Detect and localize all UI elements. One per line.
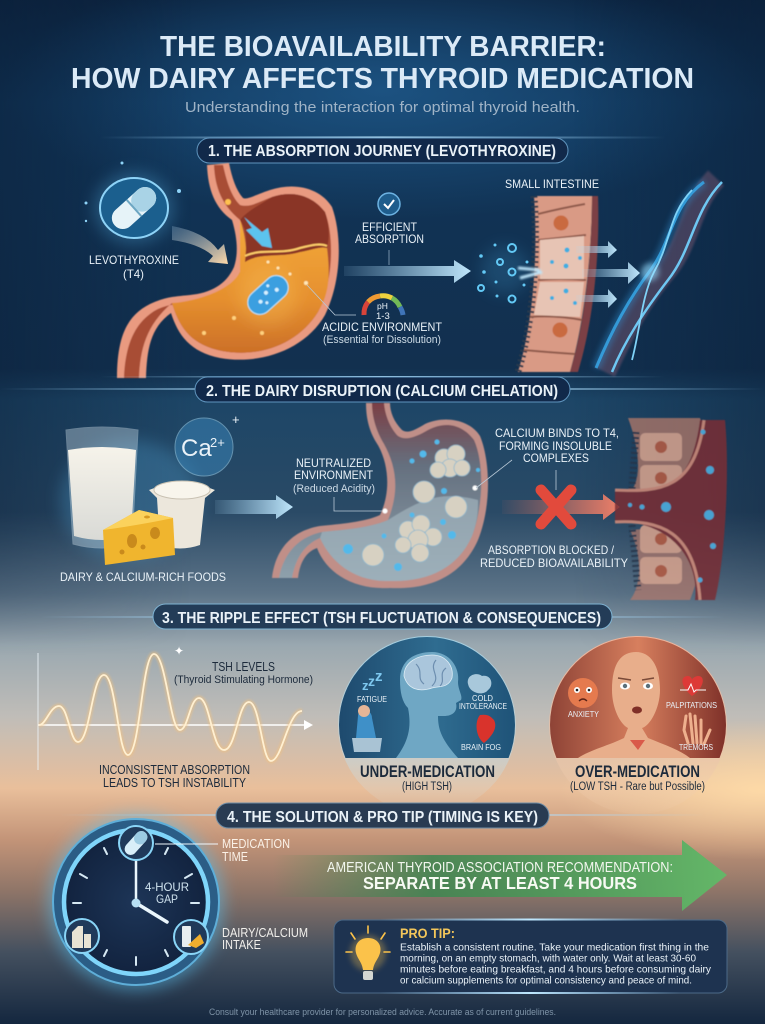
section 1 heading [100,136,665,163]
illustration: symptoms: INTOLERANCE [459,702,507,711]
footer disclaimer: Consult your healthcare provider for personalized advice. Accurate as of current guidelines. [209,1007,556,1018]
label: dairy intake: INTAKE [222,938,261,952]
label: inconsistent absorption: LEADS TO TSH INSTABILITY [103,776,247,790]
arrows: absorption into blood [518,241,640,308]
disc [338,636,516,814]
illustration: symptoms [550,637,726,758]
label: inconsistent absorption: INCONSISTENT ABSORPTION [99,763,250,777]
callout: ATA recommendation arrow: SEPARATE BY AT LEAST 4 HOURS [363,873,637,893]
illustration: symptoms: z [362,678,369,693]
ticks [73,848,199,965]
arrow: blocked absorption [502,494,620,520]
section 4 heading: 4. THE SOLUTION & PRO TIP (TIMING IS KEY) [227,809,538,826]
label: acidic environment: ACIDIC ENVIRONMENT [322,320,443,334]
label: neutralized environment: NEUTRALIZED [296,458,371,470]
subtitle: Understanding the interaction for optimal thyroid health. [185,100,580,116]
icon: pH gauge: 1-3 [376,311,390,322]
icon: calcium ion: Ca [181,435,212,462]
section 2 heading [0,376,765,402]
label: TSH levels: TSH LEVELS [212,660,275,674]
icon: dairy foods [60,427,215,565]
panel: over-medication [549,636,727,792]
label: under-medication: UNDER-MEDICATION [360,762,495,781]
label: 4-hour gap: GAP [156,892,178,906]
label: over-medication [570,762,705,793]
icon: calcium ion: + [232,412,240,427]
icon: levothyroxine pill [84,162,181,244]
label: efficient absorption: ABSORPTION [355,234,424,246]
label: absorption blocked [480,543,628,570]
icon: medication time [119,826,153,860]
label: calcium binds [476,426,619,490]
illustration: symptoms: ANXIETY [568,709,599,719]
illustration: symptoms: COLD [472,694,493,703]
icon: calcium ion: 2+ [210,435,225,450]
label: absorption blocked: ABSORPTION BLOCKED / [488,543,615,557]
panel: absorption journey [84,162,722,378]
illustration: stomach [117,163,339,378]
pro tip text: Establish a consistent routine. Take your medication first thing in the [400,942,709,954]
label: TSH levels [174,660,313,686]
label: calcium binds: FORMING INSOLUBLE [499,439,612,453]
label: medication time: MEDICATION [222,837,290,851]
label: dairy foods: DAIRY & CALCIUM-RICH FOODS [60,570,226,584]
icon: pH gauge [364,296,403,322]
label: efficient absorption [355,222,424,265]
label: efficient absorption: EFFICIENT [362,222,417,234]
icon: pH gauge: pH [377,301,388,311]
title: HOW DAIRY AFFECTS THYROID MEDICATION [71,63,694,95]
chart: TSH wave [38,644,313,770]
label: dairy intake: DAIRY/CALCIUM [222,926,308,940]
icon: light bulb [346,926,390,980]
icon: dairy right [174,920,208,954]
callout: ATA recommendation arrow [273,840,727,911]
label: levothyroxine: (T4) [123,267,144,281]
section 3 heading: 3. THE RIPPLE EFFECT (TSH FLUCTUATION & CONSEQUENCES) [162,610,601,627]
icon: calcium ion [175,412,240,476]
illustration: blocked intestine [615,418,727,600]
label: 4-hour gap: 4-HOUR [145,880,189,894]
panel: TSH chart [38,644,313,790]
illustration: intestine wall [518,196,598,372]
arrow: dairy to stomach [215,495,293,519]
label: inconsistent absorption [99,763,250,790]
label: acidic environment [322,320,443,346]
label: over-medication: (LOW TSH - Rare but Possible) [570,781,705,793]
chart: TSH wave: ✦ [174,644,184,658]
pro tip text: morning, on an empty stomach, with water only. Wait at least 30-60 [400,952,696,964]
arrow: to intestine [344,260,471,283]
label: calcium binds: COMPLEXES [523,451,589,465]
illustration: symptoms: PALPITATIONS [666,700,717,710]
section 2 heading: 2. THE DAIRY DISRUPTION (CALCIUM CHELATION) [206,383,558,400]
particles [478,244,529,302]
illustration: blood vessel [596,178,722,372]
label: absorption blocked: REDUCED BIOAVAILABILITY [480,556,628,570]
icon: check badge [378,193,400,215]
leader line [307,285,356,315]
label: small intestine: SMALL INTESTINE [505,179,599,191]
panel: pro tip [334,918,727,994]
panel: under-medication [338,636,516,814]
illustration: symptoms: z [368,673,375,689]
title [71,31,694,95]
illustration: symptoms: BRAIN FOG [461,743,501,752]
pro tip text: PRO TIP: [400,925,455,941]
disc [549,636,727,814]
illustration: symptoms: z [375,668,382,685]
section 1 heading: 1. THE ABSORPTION JOURNEY (LEVOTHYROXINE) [208,143,556,160]
clock hands [132,858,167,922]
callout: ATA recommendation arrow: AMERICAN THYROID ASSOCIATION RECOMMENDATION: [327,860,673,876]
illustration: chelated stomach [272,403,488,588]
label: dairy intake [222,926,308,952]
label: levothyroxine [89,253,179,281]
pro tip text: minutes before eating breakfast, and 4 hours before consuming dairy [400,964,712,976]
label: under-medication [360,762,495,793]
illustration: symptoms: FATIGUE [357,694,387,704]
label: 4-hour gap [145,880,189,906]
label: levothyroxine: LEVOTHYROXINE [89,253,179,267]
section 4 heading [60,803,705,828]
label: neutralized environment [293,458,384,511]
label: neutralized environment: ENVIRONMENT [294,470,373,482]
illustration: symptoms: TREMORS [679,742,713,752]
label: over-medication: OVER-MEDICATION [575,762,700,781]
label: calcium binds: CALCIUM BINDS TO T4, [495,426,619,440]
label: medication time: TIME [222,850,248,864]
icon: dairy left [65,919,99,953]
arrow: pill to stomach [172,226,228,264]
icon: red cross [541,490,571,524]
pro tip text [400,925,712,986]
pro tip text: or calcium supplements for optimal consistency and peace of mind. [400,974,692,986]
title: THE BIOAVAILABILITY BARRIER: [160,31,606,63]
label: under-medication: (HIGH TSH) [402,781,452,793]
label: acidic environment: (Essential for Dissolution) [323,334,441,346]
section 3 heading [40,604,725,629]
illustration: symptoms [339,637,515,758]
label: TSH levels: (Thyroid Stimulating Hormone) [174,674,313,686]
panel: dairy disruption [60,403,727,600]
label: medication time [155,837,290,864]
label: neutralized environment: (Reduced Acidity) [293,483,375,495]
panel: clock [48,814,308,990]
